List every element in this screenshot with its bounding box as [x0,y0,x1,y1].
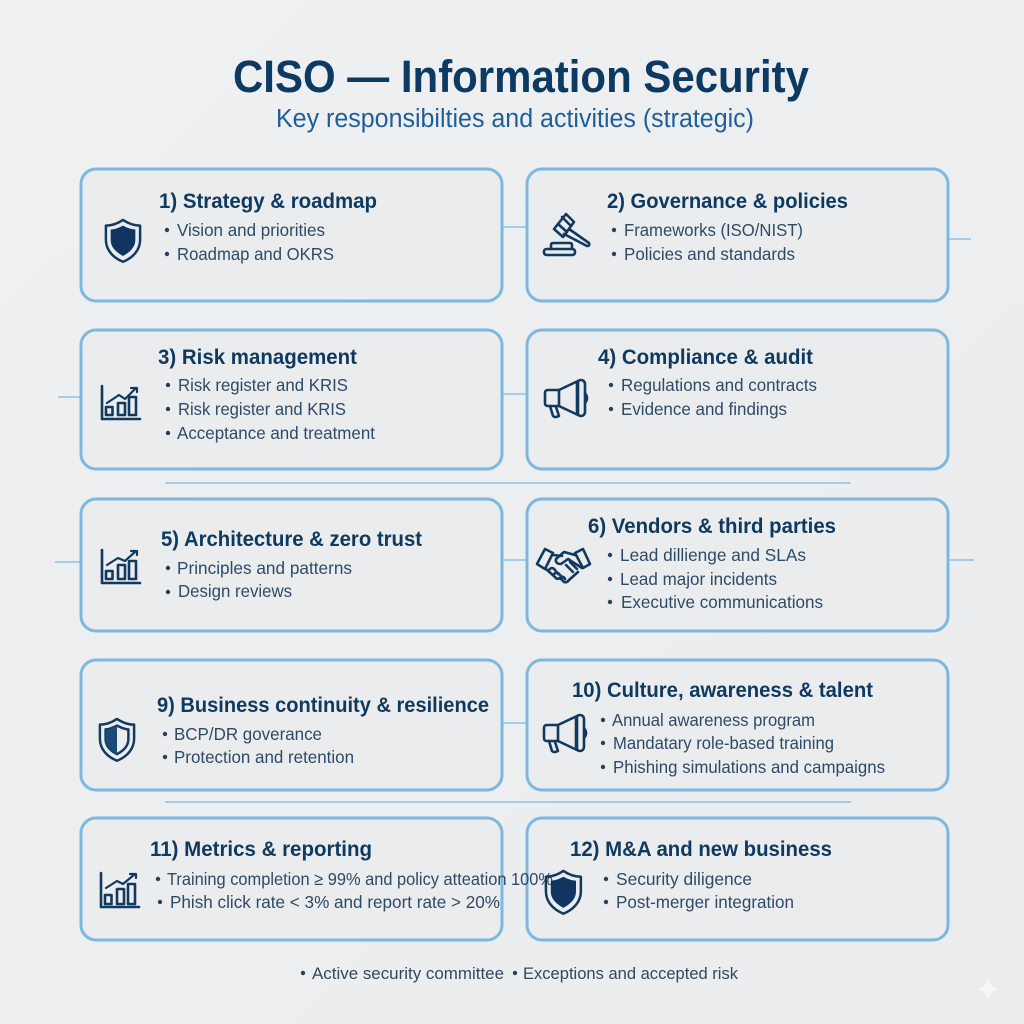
panel: 1 strategy and roadmap [81,169,502,301]
bullet list [609,375,817,419]
bullet list: Principles and patterns [177,558,352,578]
bullet list [604,869,794,912]
subtitle: Key responsibilties and activities (strategic) [276,105,754,133]
icon: sparkle [977,978,999,1001]
icon: megaphone [545,380,587,417]
bullet list: Executive communications [621,592,823,612]
footer note [301,964,738,983]
panel: 10 culture, awareness and talent [527,660,948,790]
icon: growth chart [102,550,140,583]
bullet list: Frameworks (ISO/NIST) [624,220,803,240]
footer note: Exceptions and accepted risk [523,964,738,983]
bullet list [612,220,803,264]
bullet list: BCP/DR goverance [174,724,322,744]
icon: growth chart [102,386,140,419]
icon: shield on panel 12 [546,871,581,914]
footer note: Active security committee [312,964,504,983]
heading: 11) Metrics & reporting [150,838,372,861]
bullet list: Lead dillienge and SLAs [620,545,806,565]
heading: 12) M&A and new business [570,838,832,861]
icon: gavel [544,214,589,255]
bullet list [166,375,375,443]
heading: 1) Strategy & roadmap [159,190,377,213]
icon: megaphone [544,715,586,752]
heading: 9) Business continuity & resilience [157,694,489,717]
bullet list: Mandatary role-based training [613,733,834,753]
panel: 4 compliance and audit [527,330,948,469]
panel: 6 vendors and third parties [527,499,948,631]
bullet list [156,869,553,912]
panel: 12 M&A and new business [527,818,948,940]
bullet list [165,220,334,264]
bullet list [601,710,885,777]
icon: growth chart [101,873,139,907]
panel: 11 metrics and reporting [81,818,553,940]
panel: 2 governance and policies [527,169,948,301]
bullet list: Protection and retention [174,747,354,767]
bullet list: Vision and priorities [177,220,325,240]
bullet list: Risk register and KRIS [178,399,346,419]
panel: 9 business continuity and resilience [81,660,502,790]
bullet list [608,545,823,612]
bullet list: Design reviews [178,581,292,601]
panel: 5 architecture and zero trust [81,499,502,631]
bullet list: Security diligence [616,869,752,889]
heading: 4) Compliance & audit [598,346,813,369]
bullet list: Risk register and KRIS [178,375,348,395]
icon: handshake [537,549,590,582]
bullet list: Acceptance and treatment [177,423,375,443]
heading: 6) Vendors & third parties [588,515,836,538]
bullet list: Evidence and findings [621,399,787,419]
heading: 10) Culture, awareness & talent [572,679,873,702]
bullet list: Training completion ≥ 99% and policy atteation 100% [167,869,553,889]
panel: 3 risk management [81,330,502,469]
bullet list: Lead major incidents [620,569,777,589]
bullet list [163,724,354,767]
bullet list: Policies and standards [624,244,795,264]
bullet list: Roadmap and OKRS [177,244,334,264]
heading: 2) Governance & policies [607,190,848,213]
bullet list: Phishing simulations and campaigns [613,757,885,777]
icon: shield [106,220,140,262]
bullet list: Annual awareness program [612,710,815,730]
title: CISO — Information Security [233,51,809,102]
bullet list [166,558,352,601]
bullet list: Regulations and contracts [621,375,817,395]
heading: 5) Architecture & zero trust [161,528,422,551]
heading: 3) Risk management [158,346,357,369]
icon: half shield [100,719,134,761]
bullet list: Phish click rate < 3% and report rate > 20% [170,892,500,912]
bullet list: Post-merger integration [616,892,794,912]
